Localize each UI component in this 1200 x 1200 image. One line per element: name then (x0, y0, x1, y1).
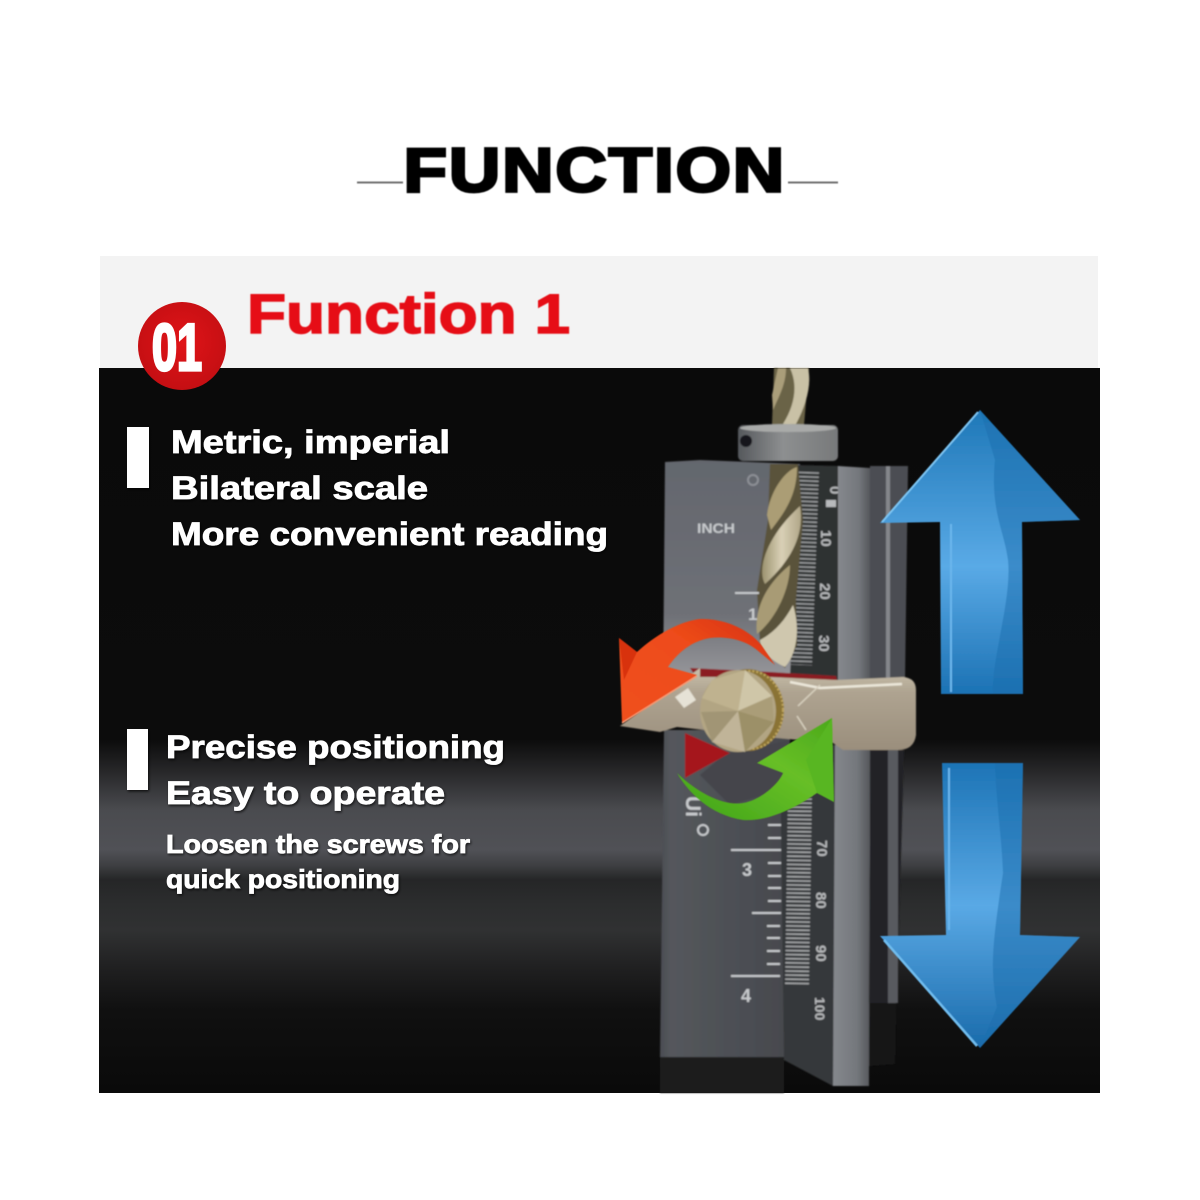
line: precise positioning: Precise positioning (166, 729, 505, 765)
marker bar (127, 729, 148, 790)
badge: 01: 01 (152, 310, 202, 384)
metric scale strip (780, 465, 840, 1086)
stop collar (738, 424, 838, 461)
heading: Function 1: Function 1 (247, 282, 570, 345)
line: quick positioning: quick positioning (166, 864, 400, 894)
line: bilateral scale: Bilateral scale (171, 470, 428, 506)
metric scale numbers (812, 486, 843, 1021)
imperial scale (681, 475, 781, 1006)
metric scale numbers: 20 (816, 583, 833, 600)
metric scale numbers: 30 (815, 635, 832, 652)
dark recess under slider (700, 740, 790, 805)
icon: red rotate arrow (619, 619, 775, 723)
line: loosen the screws: Loosen the screws for (166, 829, 470, 859)
rear rail (868, 466, 908, 1066)
imperial scale: 3 (742, 860, 752, 880)
knurled brass knob (700, 669, 784, 752)
text block: positioning features (127, 729, 505, 894)
metric scale numbers: 0 (826, 486, 843, 494)
line: easy to operate: Easy to operate (166, 775, 445, 811)
metric scale numbers: 90 (812, 945, 829, 962)
main plate (660, 460, 800, 1093)
red wedge under slider (685, 733, 730, 778)
header band (100, 256, 1098, 368)
imperial scale: 4 (741, 986, 751, 1006)
metric scale numbers: 80 (812, 892, 829, 909)
imperial scale: 1 (748, 605, 757, 624)
line: more convenient reading: More convenient reading (171, 516, 608, 552)
text block: scale features (127, 424, 608, 552)
drill bit shaft (757, 368, 809, 668)
imperial scale: INCH (697, 520, 735, 536)
heading: FUNCTION: FUNCTION (404, 136, 786, 205)
metric scale numbers: 70 (813, 840, 830, 857)
brass slider bar (620, 668, 916, 750)
line: metric, imperial: Metric, imperial (171, 424, 450, 460)
metric scale numbers: 100 (812, 997, 828, 1021)
icon: blue up arrow (880, 410, 1080, 694)
panel: dark product photo (99, 368, 1100, 1093)
imperial scale: Ui (681, 796, 704, 817)
metric scale numbers: 10 (817, 530, 834, 547)
marker bar (127, 427, 149, 488)
light side column (833, 466, 870, 1086)
icon: green rotate arrow (677, 718, 834, 820)
red band above slider (690, 668, 838, 684)
product: depth stop gauge (620, 368, 916, 1093)
icon: blue down arrow (880, 763, 1080, 1048)
